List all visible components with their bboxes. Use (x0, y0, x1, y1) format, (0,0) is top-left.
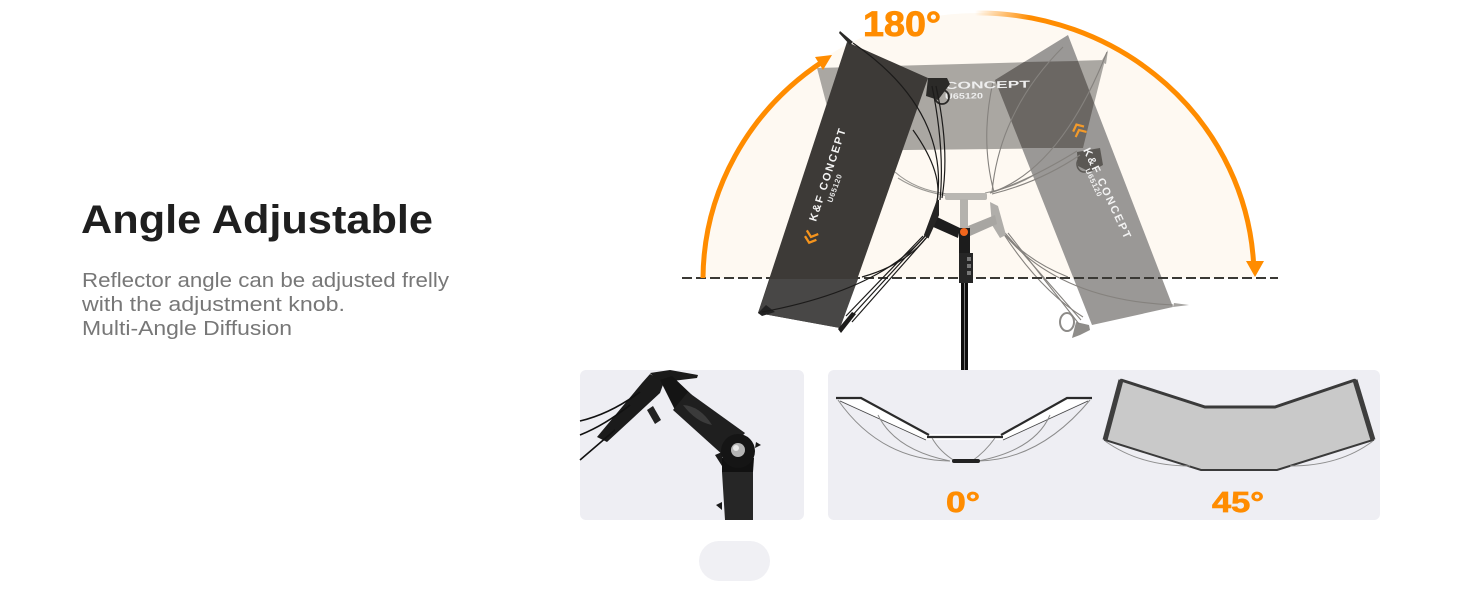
wires (762, 43, 945, 322)
back reflector brand text (945, 80, 1030, 101)
back reflector brand text: CONCEPT (945, 80, 1030, 92)
logo on right reflector (1071, 122, 1087, 137)
label: 0 degrees: 0° (946, 487, 980, 519)
grey bracket and arm (990, 202, 1006, 238)
top clip (1077, 148, 1103, 172)
corner tips (839, 31, 853, 45)
hub plate (925, 200, 938, 237)
wires (580, 392, 640, 460)
front dark reflector (758, 31, 950, 333)
clip ring bottom (1060, 313, 1074, 331)
arrow arc: left side (703, 55, 832, 278)
description text: Reflector angle can be adjusted frelly (82, 270, 449, 292)
rotation range background (702, 13, 1254, 278)
description text: with the adjustment knob. (81, 294, 345, 316)
reflector at 0 degrees (836, 398, 1092, 463)
brand text: K&F CONCEPT (807, 126, 849, 223)
heading: Angle Adjustable: Angle Adjustable (81, 198, 433, 242)
bracket plate (597, 374, 664, 442)
logo (803, 230, 818, 245)
orange adjustment knob (960, 228, 968, 236)
label: 45 degrees: 45° (1212, 487, 1264, 519)
label: 180 degrees: 180° (863, 5, 941, 44)
panel: angle comparison (828, 370, 1380, 520)
top clip (926, 78, 950, 100)
arrow arc: right side (975, 13, 1264, 277)
lower block (722, 472, 753, 520)
right reflector at 180 degrees: U65120 (1083, 167, 1104, 198)
reflector at 45 degrees (1105, 380, 1373, 470)
right reflector at 180 degrees: K&F CONCEPT (1080, 146, 1134, 242)
pill placeholder (699, 541, 770, 581)
back reflector brand text: U65120 (945, 91, 984, 101)
panel: knob close-up (580, 370, 804, 520)
front dark reflector: U65120 (825, 173, 844, 204)
back reflector at centre position (817, 50, 1108, 231)
pivot knob (721, 434, 755, 468)
arm (660, 376, 692, 412)
horizontal dashed baseline (682, 277, 1278, 279)
description text (81, 270, 449, 340)
right reflector at 180 degrees (968, 35, 1189, 338)
description text: Multi-Angle Diffusion (82, 318, 292, 340)
silver screw (731, 443, 745, 457)
light stand (931, 216, 973, 370)
